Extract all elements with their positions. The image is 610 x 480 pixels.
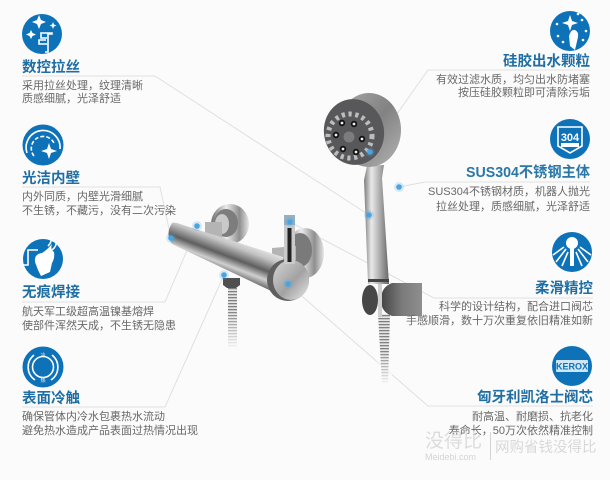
description: 航天军工级超高温镍基熔焊 xyxy=(22,304,154,318)
watermark: Meidebi.com xyxy=(425,452,476,462)
icon: silicone nozzle press xyxy=(550,11,590,51)
description: 避免热水造成产品表面过热情况出现 xyxy=(22,423,198,437)
description: 质感细腻，光泽舒适 xyxy=(22,91,121,105)
panel: 表面冷触 xyxy=(22,346,198,437)
heading: 匈牙利凯洛士阀芯 xyxy=(477,389,593,406)
description: 不生锈，不藏污，没有二次污染 xyxy=(22,203,176,217)
icon: cold and hot circulation: 冷 xyxy=(40,352,46,359)
icon: cold and hot circulation xyxy=(22,346,64,388)
icon: KEROX logo: KEROX xyxy=(556,362,588,372)
description: 寿命长，50万次依然精准控制 xyxy=(449,423,593,437)
panel: 光洁内壁 xyxy=(22,124,176,217)
heading: 硅胶出水颗粒 xyxy=(503,52,590,70)
hand shower xyxy=(318,93,422,386)
watermark: 没得比 xyxy=(425,430,482,452)
hotspot dots xyxy=(166,147,404,289)
left hose xyxy=(226,288,239,350)
description xyxy=(449,409,593,437)
shower handle xyxy=(364,165,389,284)
heading: 数控拉丝 xyxy=(22,58,80,76)
description: 耐高温、耐磨损、抗老化 xyxy=(472,409,593,423)
description: 确保管体内冷水包裹热水流动 xyxy=(22,409,165,423)
watermark: 网购省钱没得比 xyxy=(495,439,596,456)
description xyxy=(22,189,176,217)
panel: 硅胶出水颗粒 xyxy=(436,11,590,99)
panel: 无痕焊接 xyxy=(22,238,176,332)
description xyxy=(22,409,198,437)
panel: 匈牙利凯洛士阀芯 xyxy=(449,346,593,437)
nozzles xyxy=(334,121,364,154)
shower hose xyxy=(376,314,392,386)
front wall flange xyxy=(286,228,324,278)
description: 科学的设计结构，配合进口阀芯 xyxy=(439,299,593,313)
description xyxy=(406,299,593,327)
lower nut xyxy=(223,278,240,288)
icon: smooth inner wall xyxy=(22,124,64,166)
spray ring xyxy=(328,114,372,158)
icon: welding flame xyxy=(23,238,63,279)
leader lines xyxy=(22,70,593,407)
panel: SUS304不锈钢主体 xyxy=(428,119,590,213)
icon: cold and hot circulation: 热 xyxy=(40,377,46,384)
connector pipes xyxy=(205,222,296,268)
icon: brushed faucet with sparkles xyxy=(22,14,62,54)
watermark xyxy=(425,430,596,462)
description xyxy=(22,304,176,332)
description xyxy=(428,184,590,213)
icon: shower spray xyxy=(552,232,592,272)
shower head face xyxy=(318,93,390,171)
heading: SUS304不锈钢主体 xyxy=(466,163,590,181)
shower head back xyxy=(337,93,401,167)
description: 手感顺滑，数十万次重复依旧精准如新 xyxy=(406,313,593,327)
panel: 数控拉丝 xyxy=(22,14,143,105)
heading: 无痕焊接 xyxy=(22,283,80,301)
heading: 表面冷触 xyxy=(22,389,80,407)
description: 采用拉丝处理，纹理清晰 xyxy=(22,78,143,92)
valve body xyxy=(168,223,284,297)
description: SUS304不锈钢材质，机器人抛光 xyxy=(428,184,590,198)
lever handle xyxy=(284,215,295,264)
icon: 304 shield xyxy=(550,119,590,159)
icon: KEROX logo xyxy=(552,346,592,386)
end cap xyxy=(267,259,309,301)
heading: 光洁内壁 xyxy=(22,169,80,187)
description xyxy=(22,78,143,105)
description: 使部件浑然天成，不生锈无隐患 xyxy=(22,318,176,332)
description: 内外同质，内壁光滑细腻 xyxy=(22,189,143,203)
description xyxy=(436,72,590,99)
description: 拉丝处理，质感细腻，光泽舒适 xyxy=(436,199,590,213)
center disc xyxy=(344,132,354,142)
description: 有效过滤水质，均匀出水防堵塞 xyxy=(436,72,590,86)
description: 按压硅胶颗粒即可清除污垢 xyxy=(458,85,590,99)
heading: 柔滑精控 xyxy=(535,279,593,297)
icon: 304 shield: 304 xyxy=(561,132,580,144)
panel: 柔滑精控 xyxy=(406,232,593,327)
faucet valve xyxy=(168,204,324,350)
wall bracket xyxy=(362,279,422,316)
rear wall flange xyxy=(211,204,249,244)
